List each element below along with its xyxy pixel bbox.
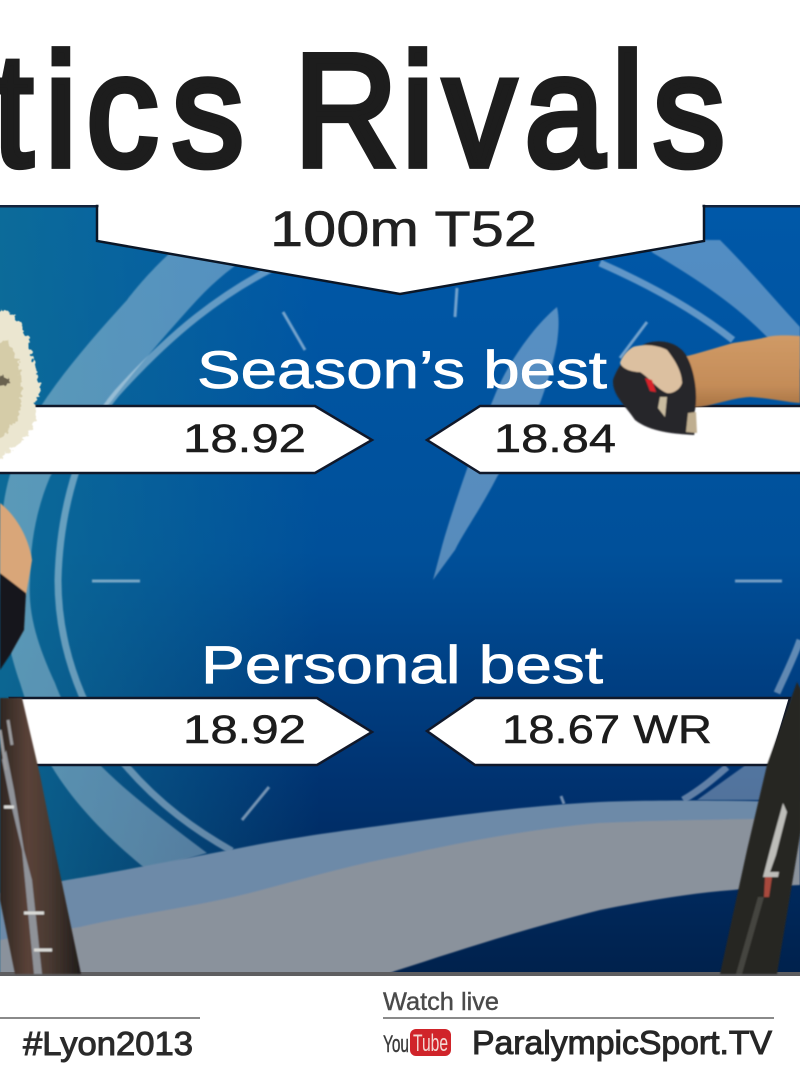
arrow: personal best right: 18.67 WR	[502, 708, 712, 752]
athlete right: wheel	[720, 682, 800, 974]
heading: season's best: Season’s best	[197, 341, 607, 400]
header tab: 100m T52: 100m T52	[270, 201, 537, 257]
needle	[433, 307, 559, 580]
panel: blue stopwatch background	[0, 205, 800, 976]
athlete right: arm and glove	[613, 335, 800, 435]
arrow: personal best left: 18.92	[183, 708, 306, 752]
stopwatch face	[0, 225, 800, 870]
icon: YouTube logo: You	[383, 1031, 409, 1058]
arrow: season's best right: 18.84	[494, 417, 616, 461]
athlete left: shoulder and sleeve	[0, 503, 32, 670]
icon: YouTube logo: Tube	[413, 1030, 448, 1057]
footer: hashtag: #Lyon2013	[23, 1025, 193, 1062]
athlete left: wheel	[0, 698, 81, 974]
icon: YouTube logo	[383, 1029, 451, 1058]
heading: personal best: Personal best	[201, 636, 603, 695]
footer: ParalympicSport.TV: ParalympicSport.TV	[472, 1024, 772, 1061]
arrow: season's best left	[0, 406, 372, 473]
arrow: season's best right	[427, 406, 800, 473]
arrow: personal best right	[427, 698, 790, 765]
athlete left: hair	[0, 310, 41, 466]
clock ticks	[92, 288, 782, 820]
arrow: season's best left: 18.92	[183, 417, 306, 461]
footer: watch live: Watch live	[383, 988, 499, 1016]
header tab: 100m T52	[97, 201, 704, 294]
arrow: personal best left	[10, 698, 372, 765]
bottom swoosh	[0, 800, 800, 975]
